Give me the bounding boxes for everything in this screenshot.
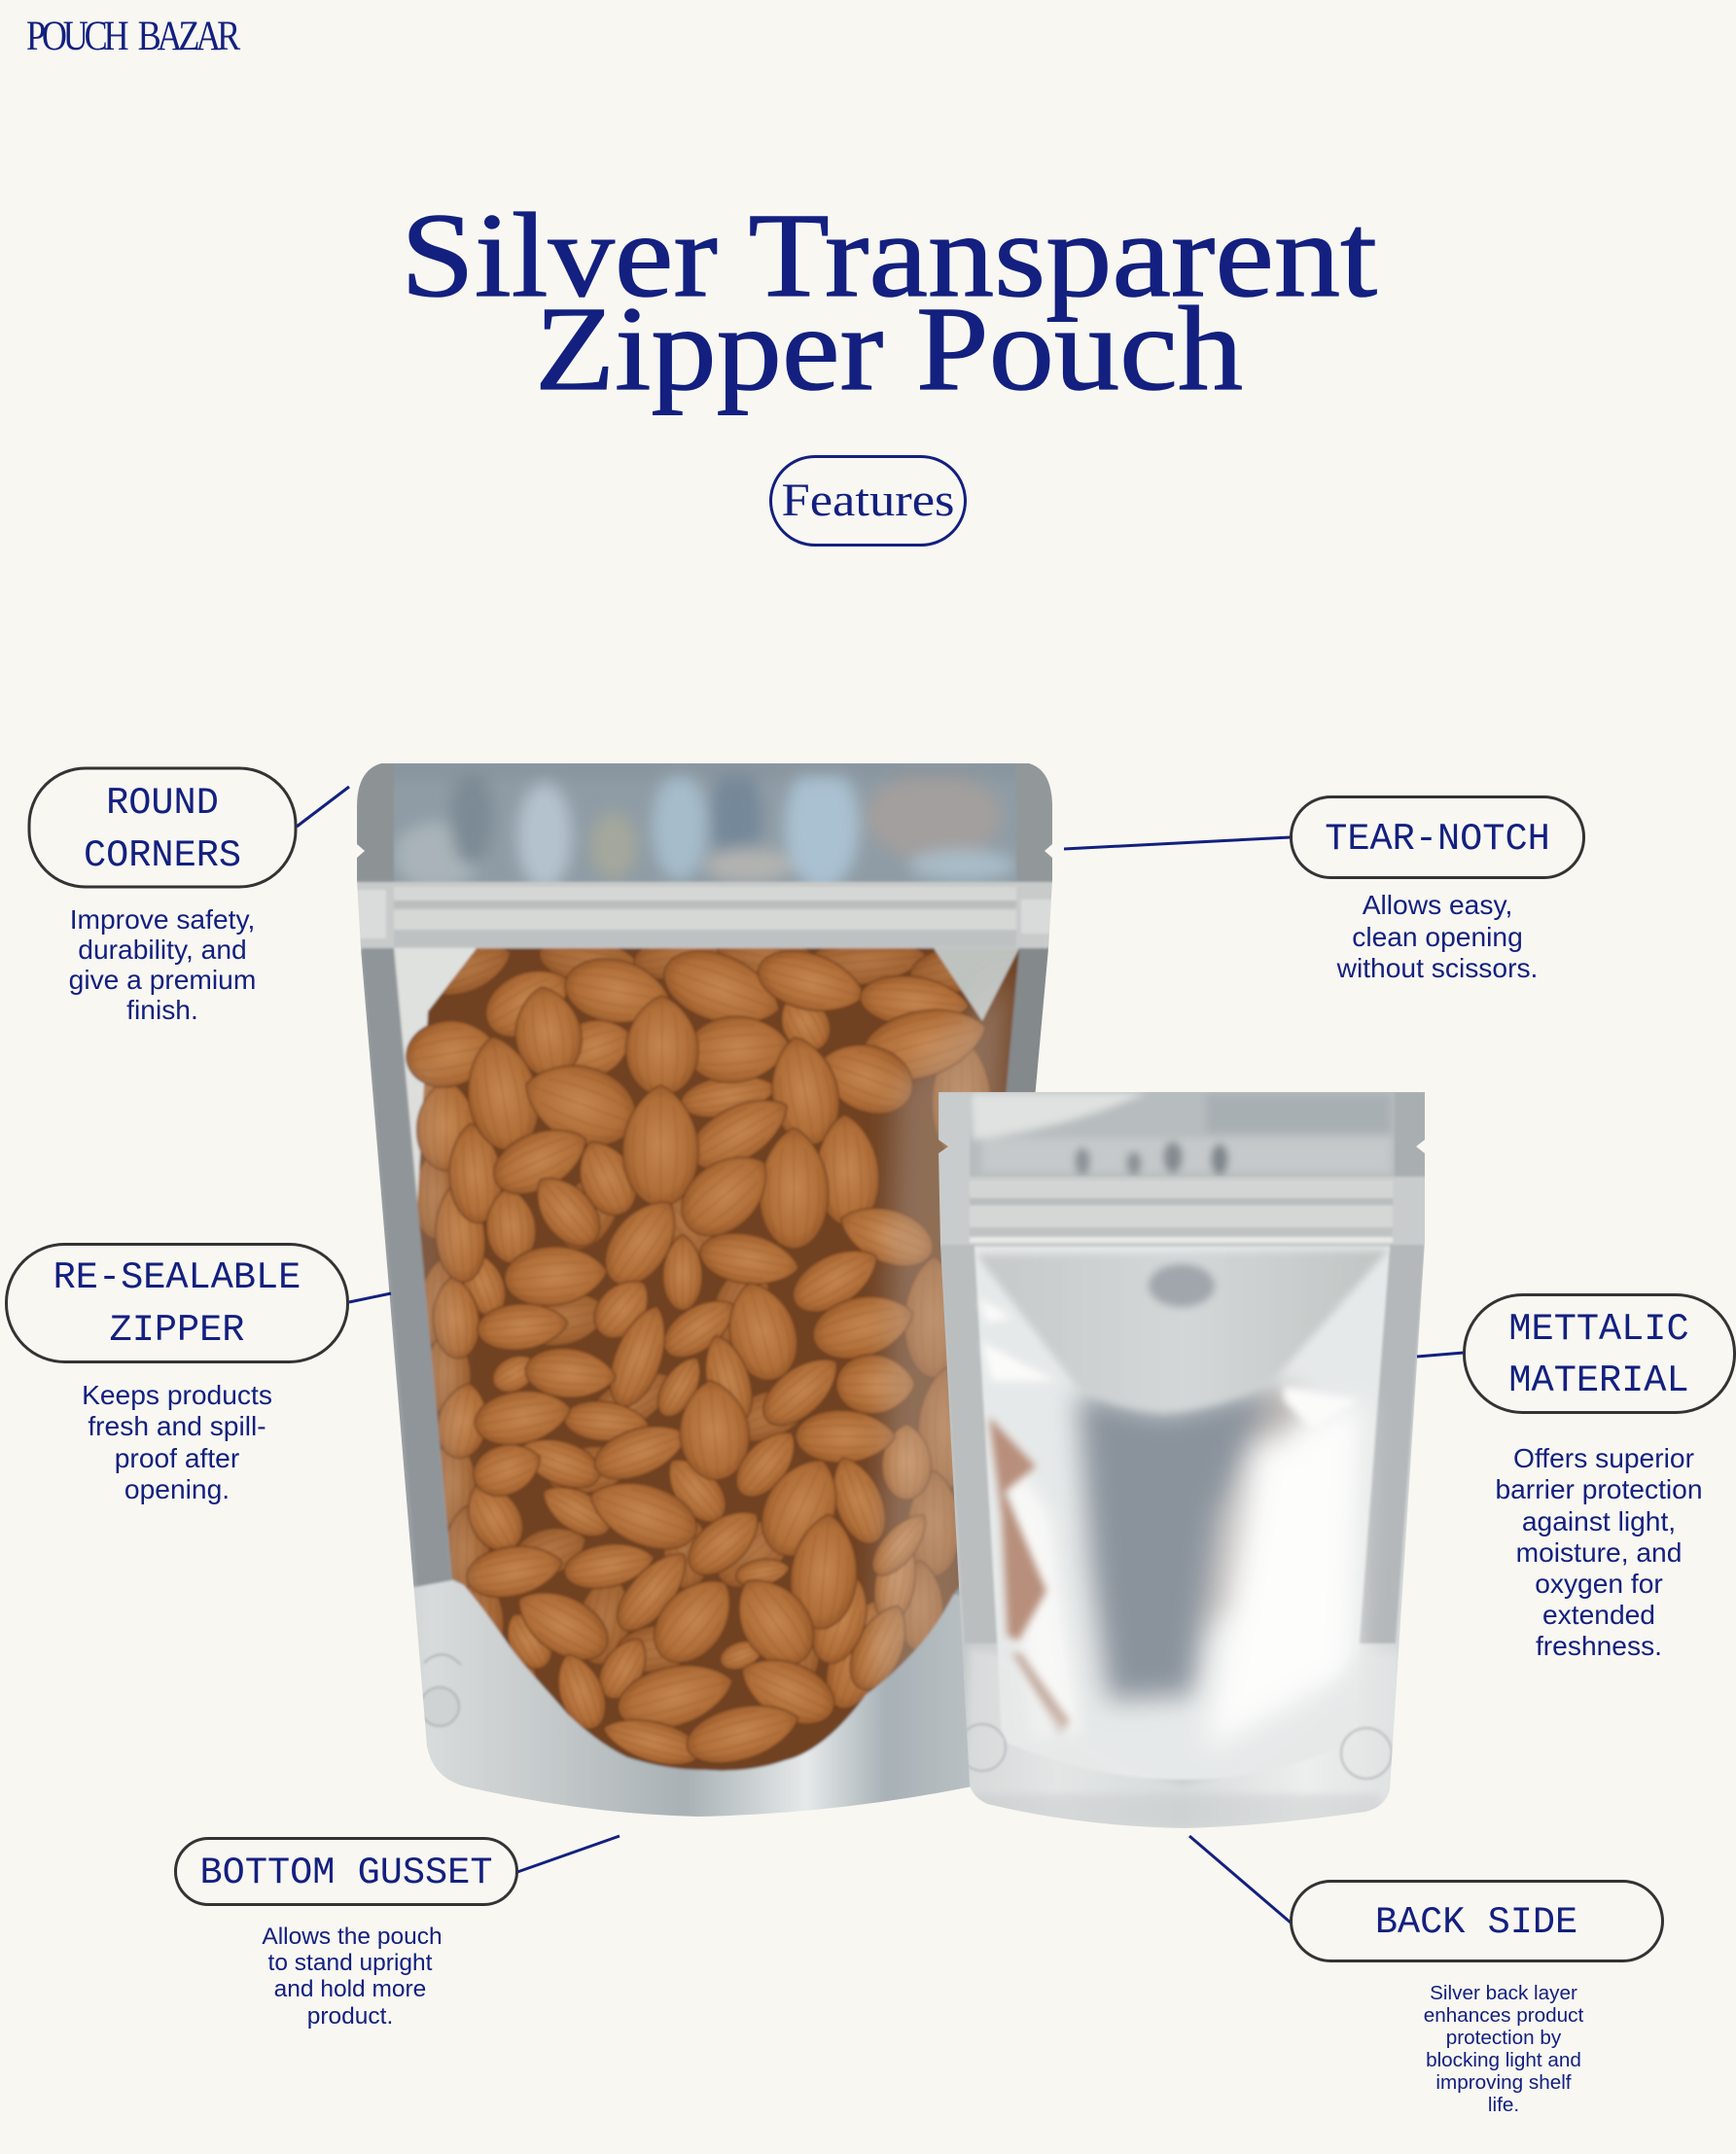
callout: re-sealable zipper xyxy=(6,1245,391,1504)
callout: back side: improving shelf xyxy=(1435,2071,1572,2094)
callout: re-sealable zipper: fresh and spill- xyxy=(88,1410,266,1441)
illustration: large pouch with almonds xyxy=(350,759,1060,1828)
side seals xyxy=(362,948,452,1595)
callout: metallic material: oxygen for xyxy=(1535,1568,1663,1599)
inner foil reflections xyxy=(974,1247,1390,1780)
callout: metallic material: moisture, and xyxy=(1516,1536,1682,1568)
white highlights xyxy=(979,1298,1357,1430)
zipper band xyxy=(350,882,1060,950)
callout: round corners: CORNERS xyxy=(84,834,241,877)
callout: tear-notch: Allows easy, xyxy=(1363,889,1512,920)
almond window xyxy=(389,922,1031,1780)
callout: tear-notch: without scissors. xyxy=(1336,952,1538,983)
pouch body xyxy=(940,1246,1424,1828)
callout: back side: life. xyxy=(1488,2094,1519,2116)
film haze over almonds xyxy=(394,972,1011,1712)
title: Zipper Pouch xyxy=(535,282,1243,415)
callout: re-sealable zipper: proof after xyxy=(115,1442,239,1473)
callout: metallic material: Offers superior xyxy=(1513,1442,1694,1473)
callout: bottom gusset: BOTTOM GUSSET xyxy=(200,1852,492,1894)
top header xyxy=(934,1087,1430,1180)
features badge: Features xyxy=(782,475,955,526)
back layer almonds xyxy=(416,947,990,1677)
illustration: small silver pouch xyxy=(934,1087,1430,1838)
callout: re-sealable zipper: ZIPPER xyxy=(110,1309,244,1352)
pouch silver body xyxy=(361,949,959,1597)
callout: re-sealable zipper: opening. xyxy=(124,1473,230,1504)
callout: round corners: give a premium xyxy=(69,964,256,995)
callout: metallic material: extended xyxy=(1542,1599,1655,1630)
callout: bottom gusset: to stand upright xyxy=(268,1950,433,1976)
callout: back side xyxy=(1189,1836,1663,2116)
almonds xyxy=(401,937,994,1773)
callout: round corners: durability, and xyxy=(78,934,247,965)
callout: bottom gusset: and hold more xyxy=(274,1976,426,2002)
features badge xyxy=(770,457,965,545)
side seals xyxy=(940,1245,998,1643)
callout: back side: enhances product xyxy=(1424,2004,1583,2027)
gusset rivets xyxy=(959,1724,1392,1779)
bottom gusset xyxy=(414,1579,971,1817)
callout: metallic material: against light, xyxy=(1522,1505,1676,1536)
zipper band xyxy=(934,1177,1430,1247)
callout: re-sealable zipper: RE-SEALABLE xyxy=(53,1256,301,1299)
logo: Pouch Bazar: POUCH BAZAR xyxy=(26,14,240,59)
copper reflection xyxy=(989,1417,1046,1641)
callout: metallic material: METTALIC xyxy=(1508,1308,1689,1351)
callout: bottom gusset xyxy=(175,1836,620,2030)
callout: tear-notch: TEAR-NOTCH xyxy=(1325,818,1550,861)
callout: round corners: ROUND xyxy=(106,782,219,825)
callout: back side: BACK SIDE xyxy=(1375,1901,1577,1944)
callout: bottom gusset: Allows the pouch xyxy=(262,1924,443,1950)
callout: back side: blocking light and xyxy=(1426,2049,1581,2071)
callout: back side: Silver back layer xyxy=(1430,1982,1577,2004)
callout: metallic material: barrier protection xyxy=(1495,1473,1703,1504)
top header panel xyxy=(357,763,1052,883)
callout: back side: protection by xyxy=(1446,2027,1562,2049)
callout: metallic material: freshness. xyxy=(1536,1630,1662,1661)
callout: re-sealable zipper: Keeps products xyxy=(82,1379,272,1410)
callout: tear-notch: clean opening xyxy=(1352,921,1523,952)
gusset rivet marks xyxy=(420,1654,461,1726)
callout: metallic material: MATERIAL xyxy=(1508,1359,1689,1402)
callout: round corners: Improve safety, xyxy=(70,903,255,935)
callout: tear-notch xyxy=(1064,797,1583,983)
left reflection xyxy=(394,948,477,1225)
callout: round corners: finish. xyxy=(126,994,198,1025)
right reflection xyxy=(934,948,1019,1021)
title xyxy=(401,189,1377,415)
title: Silver Transparent xyxy=(401,189,1377,322)
callout: round corners xyxy=(29,768,349,1025)
bottom gusset xyxy=(963,1648,1400,1838)
callout: metallic material xyxy=(1417,1295,1735,1661)
callout: bottom gusset: product. xyxy=(307,2003,393,2030)
